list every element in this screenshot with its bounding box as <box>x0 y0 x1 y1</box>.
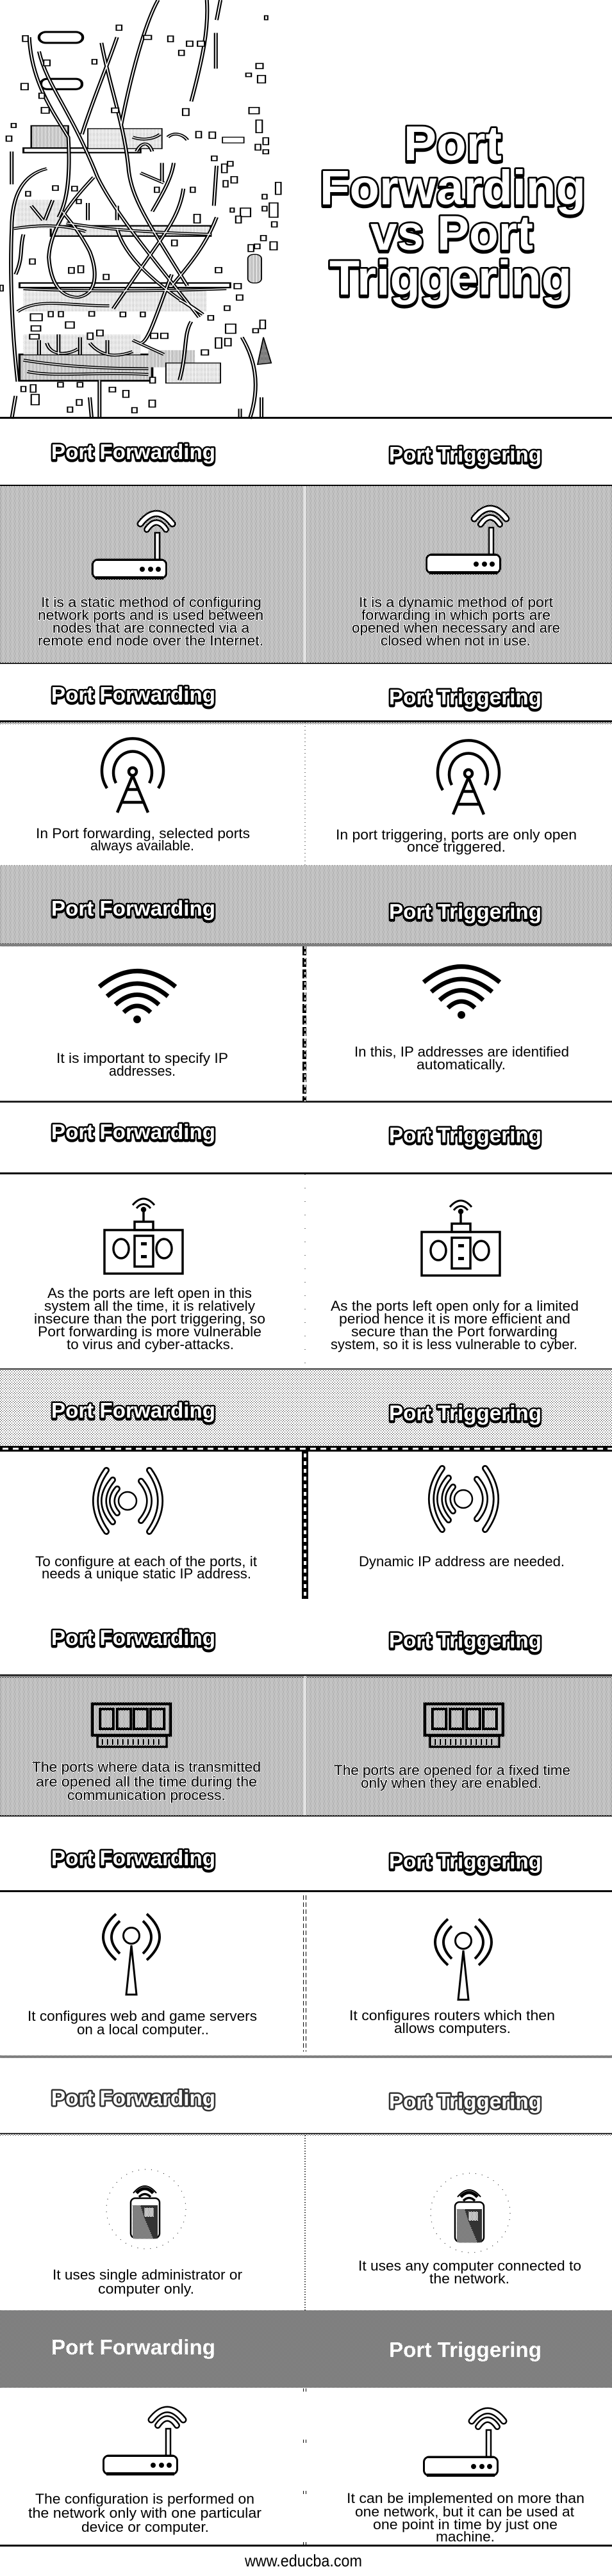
icon: router right <box>427 508 506 574</box>
title: Port <box>404 117 502 171</box>
row 5: headings: Port Triggering <box>389 1401 542 1425</box>
row 3: left text <box>56 1050 228 1079</box>
row 3: headings: Port Forwarding <box>51 896 215 920</box>
icon: router left bottom <box>104 2410 183 2475</box>
icon: memory right <box>425 1704 503 1747</box>
row 8: left text: It uses single administrator or <box>53 2267 242 2283</box>
row 3: right text: In this, IP addresses are identified <box>354 1044 569 1060</box>
icon: memory left <box>92 1704 170 1747</box>
row 4: left text <box>34 1285 265 1352</box>
row 1: left text: nodes that are connected via a <box>53 620 250 636</box>
row 5: right text: Dynamic IP address are needed. <box>359 1553 565 1569</box>
row 9: left text <box>28 2491 261 2535</box>
title: vs Port <box>370 206 533 261</box>
row 1: left text: network ports and is used between <box>38 607 263 623</box>
row 8: left text <box>53 2267 242 2297</box>
row 9: left text: The configuration is performed on <box>35 2491 254 2507</box>
icon: signal left <box>95 1470 160 1532</box>
icon: remote left <box>104 1199 183 1274</box>
row 3: left text: addresses. <box>109 1063 176 1079</box>
row 9: right text: machine. <box>436 2529 495 2545</box>
row 7: right text <box>349 2007 555 2036</box>
row 2: headings: Port Forwarding <box>51 683 215 706</box>
row 3: right text: automatically. <box>417 1057 506 1073</box>
row 8: headings: Port Forwarding <box>51 2086 215 2110</box>
row 4: right text <box>331 1298 579 1352</box>
row 7: left text <box>28 2008 257 2037</box>
icon: wifi left <box>99 971 176 1022</box>
row 3 heading band <box>0 865 612 945</box>
row 6: left text: are opened all the time during the <box>36 1774 257 1790</box>
row 9 heading band <box>0 2310 612 2388</box>
row 4: headings: Port Forwarding <box>51 1120 215 1144</box>
row 4: right text: As the ports left open only for a limited <box>331 1298 579 1314</box>
row 4: right text: secure than the Port forwarding <box>351 1324 558 1340</box>
row 4: right text: period hence it is more efficient and <box>339 1311 570 1327</box>
row 4: left text: system all the time, it is relatively <box>44 1298 255 1314</box>
footer url: www.educba.com <box>244 2551 362 2570</box>
row 9: headings: Port Forwarding <box>51 2335 215 2359</box>
row 8: right text <box>358 2258 581 2287</box>
row 6: right text: only when they are enabled. <box>361 1775 542 1791</box>
icon: tower right <box>438 740 499 814</box>
row 7: right text: It configures routers which then <box>349 2007 555 2023</box>
row 1: right text: closed when not in use. <box>381 633 531 649</box>
row 3: right text <box>354 1044 569 1073</box>
icon: antenna right <box>435 1919 492 2000</box>
row 3: headings <box>51 896 542 923</box>
row 6: headings <box>51 1626 542 1652</box>
icon: signal right <box>431 1468 496 1530</box>
icon: router left <box>92 514 172 579</box>
row 7: left text: It configures web and game servers <box>28 2008 257 2024</box>
icon: phone left <box>106 2169 186 2249</box>
row 5: headings <box>51 1398 542 1425</box>
row 9: right text: one point in time by just one <box>373 2516 558 2532</box>
row 2: right text <box>336 827 577 855</box>
row 7: right text: allows computers. <box>394 2020 511 2036</box>
row 4: headings: Port Triggering <box>389 1123 542 1147</box>
icon: tower left <box>102 738 163 813</box>
row 2: headings: Port Triggering <box>389 685 542 709</box>
row 6: left text: The ports where data is transmitted <box>32 1759 261 1775</box>
row 1: left text: remote end node over the Internet. <box>38 633 263 649</box>
row 8: right text: the network. <box>429 2271 509 2287</box>
row 5 heading band <box>0 1369 612 1449</box>
row 2: right text: once triggered. <box>407 839 506 855</box>
row 1: headings: Port Forwarding <box>51 440 215 464</box>
row 8: headings: Port Triggering <box>389 2089 542 2113</box>
row 4: left text: insecure than the port triggering, so <box>34 1311 265 1327</box>
row 9: left text: the network only with one particular <box>28 2505 261 2521</box>
row 2: left text <box>36 825 250 854</box>
row 9: left text: device or computer. <box>81 2519 209 2535</box>
row 3: left text: It is important to specify IP <box>56 1050 228 1066</box>
row 7: headings: Port Triggering <box>389 1849 542 1873</box>
row 1: headings: Port Triggering <box>389 442 542 466</box>
row 6: headings: Port Forwarding <box>51 1626 215 1649</box>
illustration: server rack cables <box>0 0 281 419</box>
icon: phone right <box>431 2173 510 2253</box>
title: Forwarding <box>320 161 586 215</box>
row 6: left text: communication process. <box>67 1787 226 1803</box>
row 5: headings: Port Forwarding <box>51 1398 215 1422</box>
row 6 panel background <box>0 1675 612 1816</box>
row 6: headings: Port Triggering <box>389 1628 542 1652</box>
icon: router right bottom <box>424 2411 504 2477</box>
row 1: left text: It is a static method of configuring <box>41 594 261 610</box>
row 9: right text <box>347 2490 584 2545</box>
row 2: headings <box>51 683 542 709</box>
row 7: left text: on a local computer.. <box>77 2021 209 2037</box>
icon: antenna left <box>103 1914 160 1995</box>
row 9: right text: It can be implemented on more than <box>347 2490 584 2506</box>
row 1: right text: forwarding in which ports are <box>361 607 550 623</box>
row 4: left text: to virus and cyber-attacks. <box>67 1336 234 1352</box>
row 4: right text: system, so it is less vulnerable to cyber. <box>331 1336 577 1352</box>
row 9: headings <box>51 2335 542 2361</box>
row 2: left text: always available. <box>90 838 194 854</box>
icon: remote right <box>422 1201 500 1276</box>
row 9: right text: one network, but it can be used at <box>355 2504 574 2520</box>
row 1: right text: It is a dynamic method of port <box>359 594 553 610</box>
row 1 panel background <box>0 485 612 663</box>
row 6: left text <box>32 1759 261 1803</box>
row 3: headings: Port Triggering <box>389 900 542 923</box>
row 7: headings: Port Forwarding <box>51 1846 215 1870</box>
title: Triggering <box>329 251 572 305</box>
row 5: left text <box>35 1553 257 1582</box>
row 4: left text: Port forwarding is more vulnerable <box>38 1324 261 1340</box>
row 8: headings <box>51 2086 542 2113</box>
row 5: left text: needs a unique static IP address. <box>42 1566 251 1582</box>
row 1: left text <box>38 594 263 649</box>
icon: wifi right <box>424 967 500 1017</box>
row 7: headings <box>51 1846 542 1873</box>
row 9: headings: Port Triggering <box>389 2338 542 2361</box>
row 1: headings <box>51 440 542 466</box>
row 4: headings <box>51 1120 542 1147</box>
row 2: right text: In port triggering, ports are only open <box>336 827 577 843</box>
title <box>320 117 586 305</box>
row 5: left text: To configure at each of the ports, it <box>35 1553 257 1569</box>
row 2: left text: In Port forwarding, selected ports <box>36 825 250 841</box>
row 8: right text: It uses any computer connected to <box>358 2258 581 2274</box>
row 1: right text <box>352 594 560 649</box>
row 8: left text: computer only. <box>98 2281 194 2297</box>
row 1: right text: opened when necessary and are <box>352 620 560 636</box>
row 6: right text <box>334 1762 570 1791</box>
row 4: left text: As the ports are left open in this <box>47 1285 252 1301</box>
row 6: right text: The ports are opened for a fixed time <box>334 1762 570 1778</box>
